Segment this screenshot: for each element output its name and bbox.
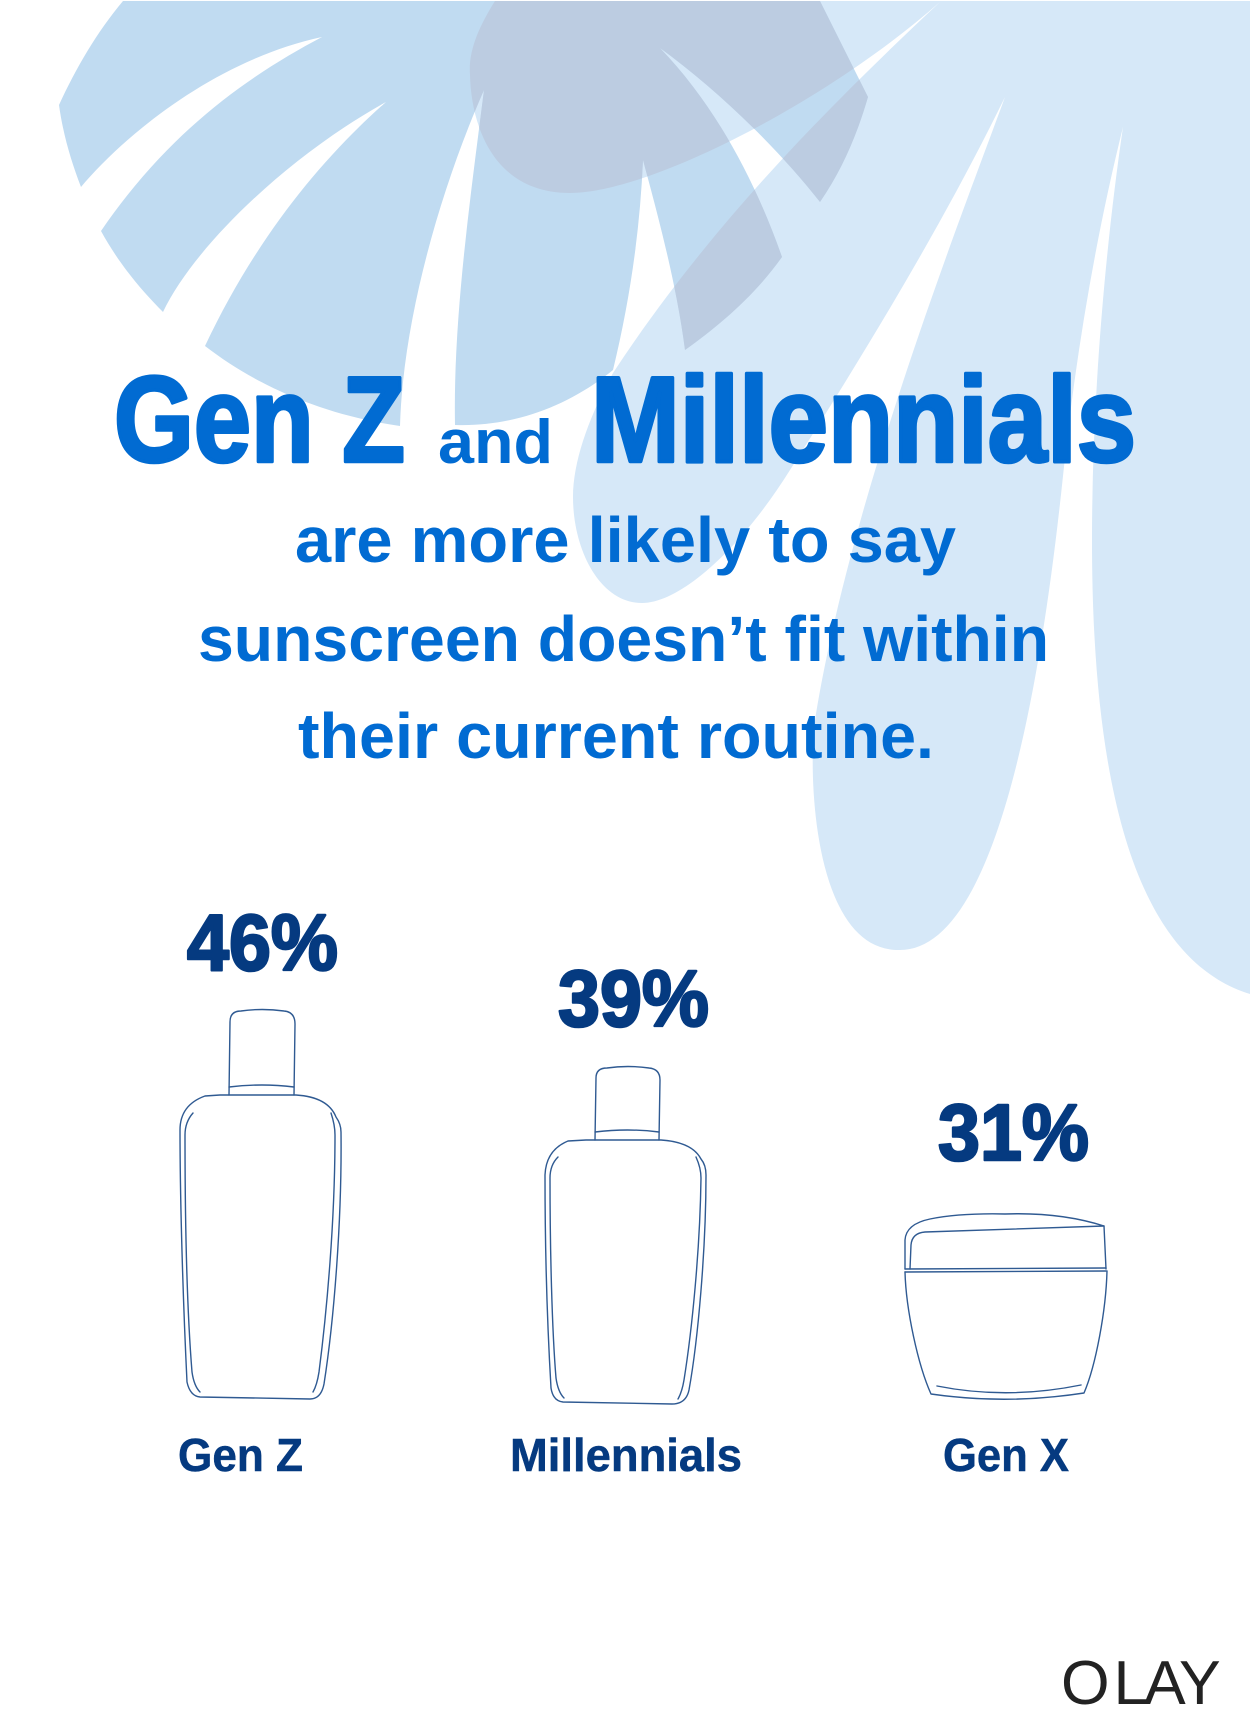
column: Gen X xyxy=(905,1088,1107,1481)
subheading text: their current routine. xyxy=(298,700,934,772)
stat: 46%: 46% xyxy=(187,898,338,987)
background flower: light blue xyxy=(470,1,1250,994)
label: Gen Z: Gen Z xyxy=(178,1429,303,1481)
subheading text xyxy=(198,504,1049,772)
subheading text: are more likely to say xyxy=(295,504,956,576)
stat: 31%: 31% xyxy=(938,1088,1089,1177)
headline xyxy=(114,352,1136,488)
headline: and xyxy=(438,408,553,477)
background flower: mid blue xyxy=(59,1,868,426)
background flower: overlap of the two flowers xyxy=(470,1,868,350)
headline: Millennials xyxy=(591,352,1136,488)
logo: OLAY: OLAY xyxy=(1061,1648,1221,1718)
stat: 39%: 39% xyxy=(558,954,709,1043)
column: Millennials xyxy=(510,954,742,1481)
subheading text: sunscreen doesn’t fit within xyxy=(198,603,1049,675)
column: Gen Z xyxy=(178,898,341,1481)
icon: medium bottle Millennials xyxy=(545,1066,706,1404)
icon: tall bottle Gen Z xyxy=(180,1010,341,1399)
headline: Gen Z xyxy=(114,352,405,488)
label: Millennials: Millennials xyxy=(510,1429,742,1481)
label: Gen X: Gen X xyxy=(943,1429,1069,1481)
icon: cream jar Gen X xyxy=(905,1214,1107,1399)
